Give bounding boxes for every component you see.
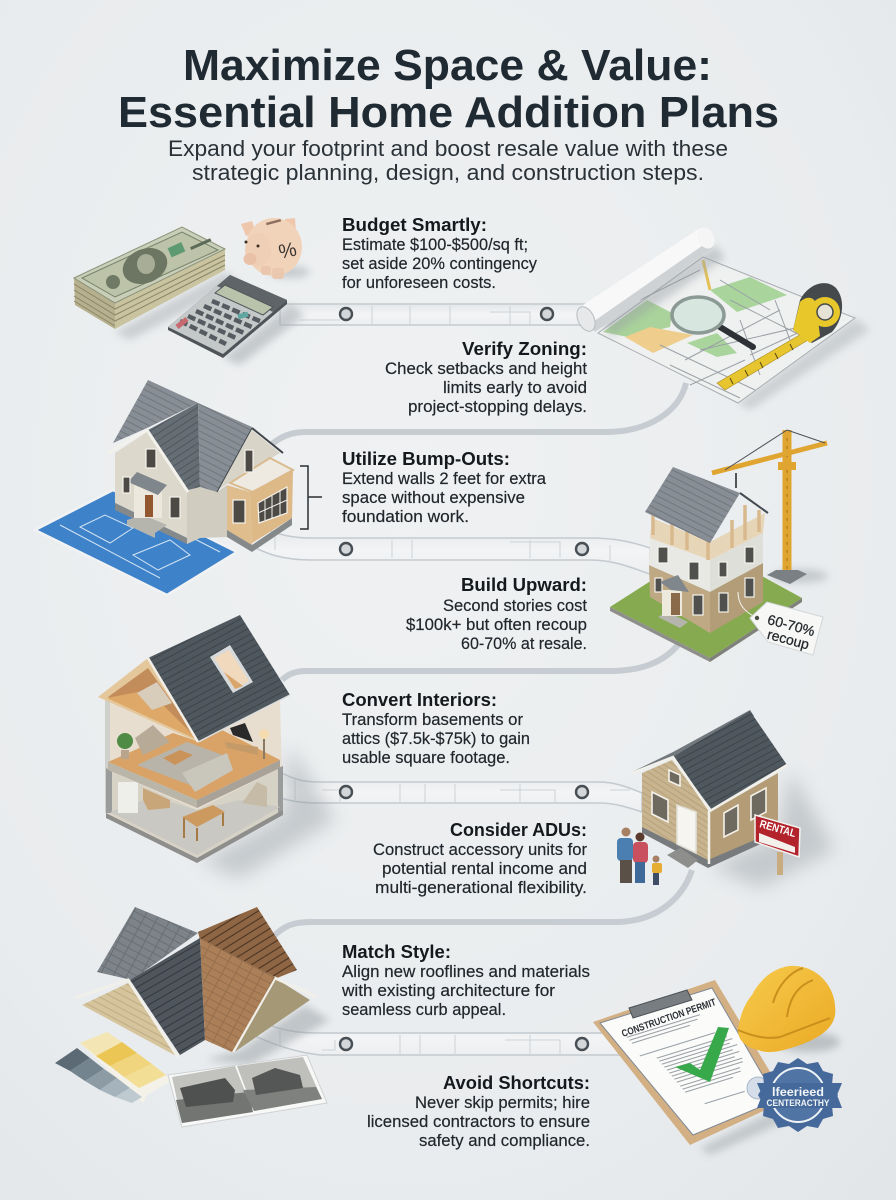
check mark <box>675 1027 729 1082</box>
text: Convert Interiors: attics ($7.5k-$75k) to gain <box>342 730 530 748</box>
icon: piggy bank: % <box>277 238 299 264</box>
windows <box>123 449 287 523</box>
subtitle <box>168 136 728 185</box>
text: Match Style: Align new rooflines and materials <box>342 963 590 981</box>
bracket marker <box>300 466 322 529</box>
text: Match Style: seamless curb appeal. <box>342 1001 506 1019</box>
connector curve 3 <box>274 870 692 936</box>
connector ribbon 3 <box>280 772 642 812</box>
connector curve 2 <box>282 645 678 680</box>
text: Verify Zoning: limits early to avoid <box>443 379 587 397</box>
icon: hard hat <box>738 966 840 1052</box>
attic <box>98 658 198 742</box>
text: Utilize Bump-Outs <box>342 449 547 526</box>
text: Convert Interiors: Transform basements or <box>342 711 524 729</box>
connector ribbon 1 <box>280 304 600 325</box>
connector ribbon 2 <box>250 527 650 574</box>
text: Build Upward: 60-70% at resale. <box>461 635 587 653</box>
title: Maximize Space & Value: <box>183 41 712 90</box>
callout: recoup price tag <box>750 602 823 655</box>
lower floor <box>106 782 283 863</box>
callout: recoup price tag: recoup <box>766 626 811 652</box>
gable siding <box>75 978 317 1057</box>
paper <box>600 988 777 1135</box>
icon: before and after photos <box>168 1055 327 1127</box>
subtitle: Expand your footprint and boost resale value with these <box>168 136 728 161</box>
icon: permit clipboard <box>593 980 800 1155</box>
text: Consider ADUs: Construct accessory units for <box>373 841 588 859</box>
map sheet <box>598 257 855 403</box>
clip <box>629 990 692 1018</box>
text: Avoid Shortcuts <box>367 1073 590 1150</box>
icon: licensed contractor badge: lfeerieed <box>772 1085 824 1099</box>
title: Essential Home Addition Plans <box>118 88 779 137</box>
icon: calculator <box>168 275 305 365</box>
text: Avoid Shortcuts: safety and compliance. <box>419 1132 590 1150</box>
permit lines <box>625 1012 770 1110</box>
icon: matching roof sections <box>75 907 330 1065</box>
roof <box>108 380 283 492</box>
title <box>118 41 779 137</box>
porch <box>127 472 167 538</box>
walls <box>105 698 283 860</box>
windows and door <box>652 770 766 853</box>
text: Utilize Bump-Outs: foundation work. <box>342 508 469 526</box>
text: Utilize Bump-Outs: Utilize Bump-Outs: <box>342 449 510 469</box>
skylight <box>210 645 253 693</box>
stamp <box>747 1077 769 1099</box>
text: Build Upward: $100k+ but often recoup <box>406 616 587 634</box>
text: Match Style <box>341 942 590 1019</box>
text: Match Style: with existing architecture for <box>341 982 556 1000</box>
back roof panels <box>97 907 297 980</box>
text: Avoid Shortcuts: Avoid Shortcuts: <box>443 1073 590 1093</box>
roof <box>645 467 768 543</box>
icon: rental sign <box>755 815 800 875</box>
icon: piggy bank <box>241 218 310 279</box>
permit heading: CONSTRUCTION PERMIT <box>620 997 718 1040</box>
icon: rental sign: RENTAL <box>758 818 797 840</box>
icon: blueprint <box>35 490 237 595</box>
walls <box>115 430 293 552</box>
text: Verify Zoning: Check setbacks and height <box>385 360 587 378</box>
icon: zoning map with magnifier and tape <box>573 225 870 410</box>
text: Consider ADUs <box>373 820 588 897</box>
text: Verify Zoning: Verify Zoning: <box>462 339 587 359</box>
paper roll <box>573 225 725 336</box>
magnifying glass <box>672 297 753 347</box>
house walls <box>649 513 765 633</box>
text: Verify Zoning <box>385 339 587 416</box>
text: Consider ADUs: potential rental income and <box>382 860 587 878</box>
text: Verify Zoning: project-stopping delays. <box>408 398 587 416</box>
connector curve 1 <box>272 383 686 444</box>
text: Match Style: Match Style: <box>342 942 451 962</box>
tape measure <box>717 283 842 390</box>
icon: construction crane <box>712 430 828 584</box>
text: Build Upward <box>406 575 587 653</box>
connector ribbon 4 <box>255 1022 620 1055</box>
icon: house with bump-out <box>108 380 293 552</box>
text: Utilize Bump-Outs: Extend walls 2 feet for extra <box>342 470 547 488</box>
text: Budget Smartly: Budget Smartly: <box>342 215 487 235</box>
roof <box>148 615 290 742</box>
text: Consider ADUs: Consider ADUs: <box>450 820 587 840</box>
text: Consider ADUs: multi-generational flexibility. <box>375 879 587 897</box>
icon: cash stack <box>74 227 240 340</box>
text: Avoid Shortcuts: licensed contractors to ensure <box>367 1113 590 1131</box>
walls <box>642 760 778 868</box>
text: Convert Interiors: Convert Interiors: <box>342 690 497 710</box>
icon: family <box>617 828 662 885</box>
board <box>593 980 787 1145</box>
text: Build Upward: Build Upward: <box>461 575 587 595</box>
text: Convert Interiors: usable square footage. <box>342 749 510 767</box>
text: Avoid Shortcuts: Never skip permits; hire <box>415 1094 590 1112</box>
wood floor <box>108 730 280 808</box>
text: Build Upward: Second stories cost <box>443 597 587 615</box>
furniture <box>117 723 269 792</box>
callout: recoup price tag: 60-70% <box>766 611 817 639</box>
icon: cutaway house interior <box>98 615 335 878</box>
icon: ADU cottage <box>632 710 835 888</box>
porch <box>658 575 689 628</box>
icon: colour swatches <box>55 1032 172 1103</box>
grass base <box>610 575 802 662</box>
icon: licensed contractor badge <box>757 1058 842 1132</box>
text: Budget Smartly: set aside 20% contingency <box>342 255 538 273</box>
map colour zones <box>603 260 830 398</box>
text: Budget Smartly: Estimate $100-$500/sq ft; <box>342 236 528 254</box>
icon: licensed contractor badge: CENTERACTHY <box>766 1098 830 1108</box>
roof <box>632 710 787 864</box>
text: Budget Smartly <box>342 215 538 292</box>
subtitle: strategic planning, design, and construction steps. <box>192 160 704 185</box>
text: Budget Smartly: for unforeseen costs. <box>342 274 496 292</box>
front roof panels <box>130 938 275 1055</box>
text: Utilize Bump-Outs: space without expensive <box>342 489 525 507</box>
text: Convert Interiors <box>342 690 530 767</box>
windows <box>655 547 754 615</box>
icon: two-storey addition house <box>610 467 802 662</box>
